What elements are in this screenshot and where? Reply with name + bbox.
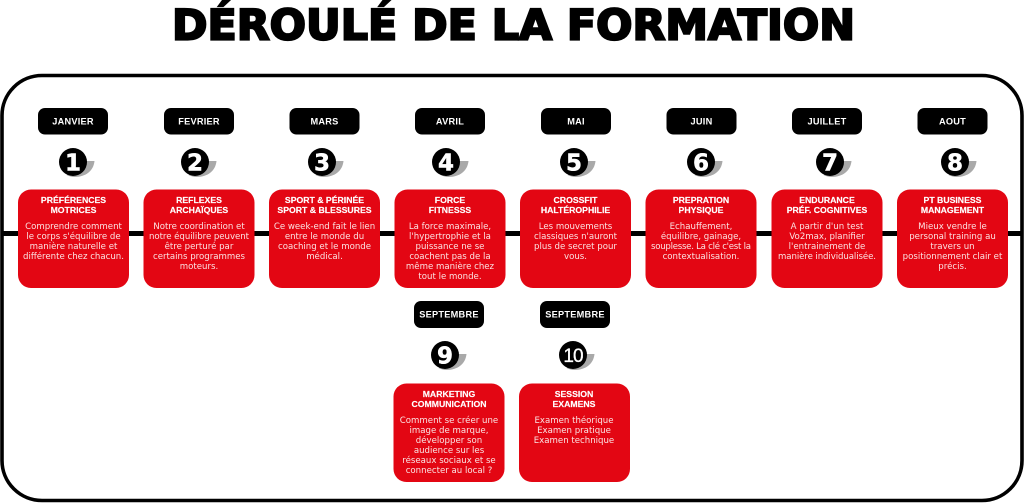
step 2: fevrier: moteurs. (180, 262, 218, 272)
step 8: aout: PT BUSINESS (924, 195, 982, 205)
step 3: mars: MARS (310, 116, 339, 126)
step 5: mai: Les mouvements (539, 222, 613, 232)
step 4: avril: 4 (438, 150, 454, 176)
step 6: juin: équilibre, gainage, (661, 231, 741, 242)
step 9: septembre marketing (394, 301, 504, 482)
step 1: janvier: différente chez chacun. (23, 251, 124, 262)
step 8: aout: personal training au (909, 232, 996, 242)
step 5: mai: classiques n'auront (534, 232, 618, 242)
step 2: fevrier (144, 108, 254, 288)
step 2: fevrier: REFLEXES (176, 195, 222, 205)
step 9: septembre marketing: 9 (437, 343, 453, 369)
step 6: juin: Echauffement, (670, 222, 732, 232)
step 8: aout: précis. (938, 261, 967, 272)
step 2: fevrier: Notre coordination et (153, 222, 245, 232)
step 9: septembre marketing: connecter au local ? (406, 466, 492, 476)
step 3: mars: SPORT & PÉRINÉE (285, 195, 364, 205)
step 7: juillet: manière individualisée. (778, 251, 876, 262)
step 1: janvier: 1 (65, 150, 81, 176)
step 3: mars: coaching et le monde (278, 242, 371, 252)
step 4: avril: AVRIL (436, 116, 464, 126)
title: DÉROULÉ DE LA FORMATION (172, 0, 855, 50)
step 10: septembre examens: Examen pratique (537, 426, 611, 436)
step 2: fevrier: 2 (187, 150, 203, 176)
step 6: juin: 6 (693, 150, 709, 176)
step 5: mai (520, 108, 631, 288)
step 7: juillet: ENDURANCE (799, 195, 855, 205)
step 5: mai: 5 (566, 150, 582, 176)
step 6: juin (646, 108, 756, 288)
step 4: avril: FORCE (435, 195, 465, 205)
step 3: mars: 3 (314, 150, 330, 176)
step 10: septembre examens: EXAMENS (553, 399, 596, 409)
step 6: juin: souplesse. La clé c'est la (651, 241, 751, 252)
step 10: septembre examens: SESSION (555, 389, 593, 399)
step 4: avril: même manière chez (406, 261, 495, 272)
step 4: avril: tout le monde. (418, 272, 482, 282)
step 7: juillet: Vo2max, planifier (789, 232, 865, 242)
step 9: septembre marketing: MARKETING (423, 389, 476, 399)
step 8: aout: AOUT (939, 116, 966, 126)
step 3: mars (269, 108, 380, 288)
step 8: aout: positionnement clair et (903, 252, 1003, 262)
step 10: septembre examens: SEPTEMBRE (545, 310, 605, 320)
step 5: mai: MAI (567, 116, 585, 126)
step 4: avril: La force maximale, (409, 222, 491, 232)
step 9: septembre marketing: COMMUNICATION (411, 399, 487, 409)
step 7: juillet: A partir d'un test (791, 222, 864, 232)
step 9: septembre marketing: Comment se créer une (400, 415, 498, 426)
step 9: septembre marketing: développer son (416, 435, 482, 446)
step 3: mars: Ce week-end fait le lien (274, 222, 375, 232)
step 1: janvier: JANVIER (52, 116, 94, 126)
step 8: aout: 8 (947, 150, 963, 176)
step 2: fevrier: ARCHAÏQUES (170, 205, 228, 215)
step 2: fevrier: notre équilibre peuvent (149, 231, 250, 242)
step 5: mai: vous. (564, 252, 587, 262)
step 10: septembre examens (519, 301, 630, 482)
step 1: janvier: le corps s'équilibre de (26, 231, 121, 242)
step 9: septembre marketing: réseaux sociaux et se (402, 455, 496, 466)
step 7: juillet: JUILLET (807, 116, 847, 126)
step 6: juin: PHYSIQUE (679, 205, 724, 215)
step 9: septembre marketing: image de marque, (410, 426, 488, 436)
step 10: septembre examens: 10 (563, 346, 583, 367)
step 1: janvier (18, 108, 129, 288)
step 3: mars: médical. (306, 251, 343, 262)
step 4: avril (394, 108, 506, 288)
step 4: avril: FITNESSS (429, 205, 471, 215)
step 2: fevrier: certains programmes (153, 252, 246, 262)
step 5: mai: plus de secret pour (534, 242, 617, 252)
step 8: aout: travers un (930, 242, 975, 252)
step 1: janvier: MOTRICES (51, 205, 97, 215)
step 10: septembre examens: Examen théorique (534, 415, 614, 426)
step 4: avril: puissance ne se (416, 242, 484, 252)
step 2: fevrier: être perturé par (165, 241, 234, 252)
step 9: septembre marketing: audience sur les (414, 446, 485, 456)
step 5: mai: HALTÉROPHILIE (541, 205, 610, 215)
step 7: juillet: l'entrainement de (789, 242, 865, 252)
step 8: aout: Mieux vendre le (918, 222, 987, 232)
step 6: juin: JUIN (691, 116, 713, 126)
timeline line (2, 231, 1022, 236)
step 4: avril: coachent pas de la (409, 252, 491, 262)
step 4: avril: l'hypertrophie et la (409, 232, 491, 242)
step 9: septembre marketing: SEPTEMBRE (419, 310, 479, 320)
step 6: juin: PREPRATION (673, 195, 729, 205)
step 8: aout (897, 108, 1008, 288)
step 2: fevrier: FEVRIER (178, 116, 220, 126)
step 3: mars: SPORT & BLESSURES (277, 205, 372, 215)
step 3: mars: entre le monde du (285, 232, 364, 242)
step 8: aout: MANAGEMENT (921, 205, 985, 215)
step 7: juillet: PRÉF. COGNITIVES (787, 205, 868, 215)
step 1: janvier: manière naturelle et (30, 241, 118, 252)
step 6: juin: contextualisation. (663, 252, 739, 262)
step 1: janvier: Comprendre comment (25, 222, 123, 232)
step 5: mai: CROSSFIT (554, 195, 598, 205)
step 1: janvier: PRÉFÉRENCES (41, 195, 106, 205)
step 7: juillet (772, 108, 882, 288)
step 7: juillet: 7 (822, 150, 838, 176)
step 10: septembre examens: Examen technique (534, 436, 614, 446)
